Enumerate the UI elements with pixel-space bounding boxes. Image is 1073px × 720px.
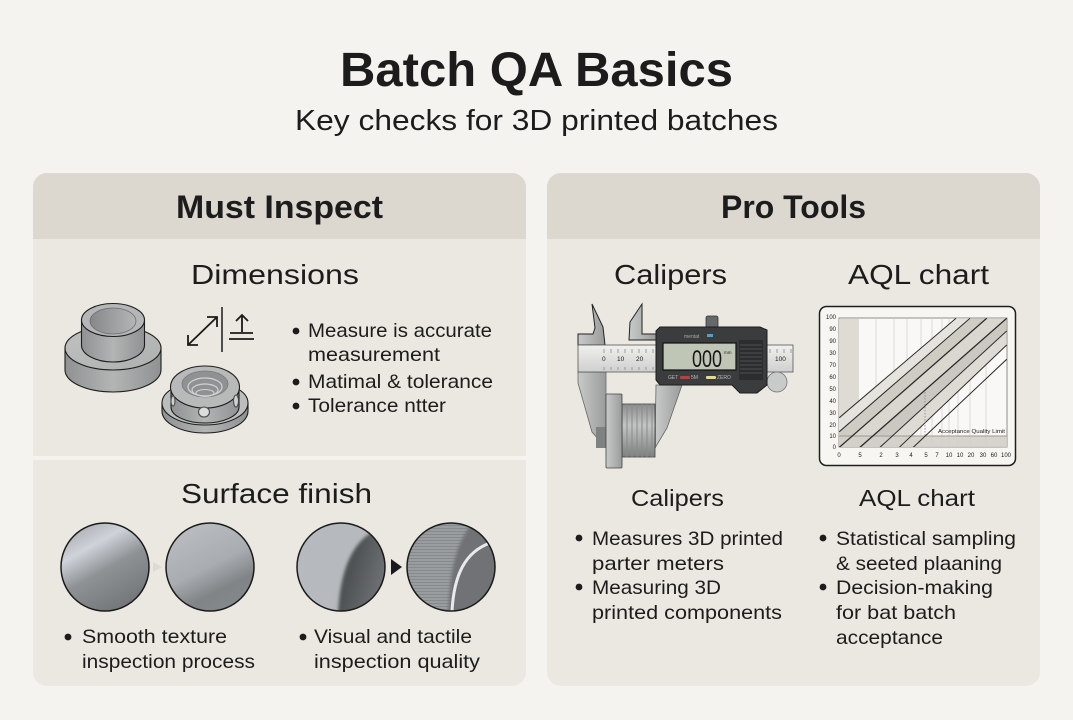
panel header band	[33, 173, 526, 239]
bullet list: calipers: Measures 3D printed	[592, 528, 783, 550]
bullet list: calipers: printed components	[592, 602, 782, 624]
bullet list: dimensions: Tolerance ntter	[308, 395, 447, 417]
section heading: surface finish: Surface finish	[181, 478, 372, 509]
chart x axis labels: 5	[924, 453, 928, 459]
panel header band	[547, 173, 1040, 239]
swatch: textured surface pair	[297, 520, 500, 615]
icon: digital calipers: 10	[617, 356, 625, 363]
icon: digital calipers	[578, 304, 793, 468]
chart y axis labels: 30	[829, 411, 837, 417]
chart annotation: Acceptance Quality Limit	[938, 429, 1005, 435]
panel heading: Pro Tools	[721, 189, 866, 225]
bullet list: AQL chart: & seeted plaaning	[836, 553, 1002, 575]
chart y axis labels: 90	[829, 327, 837, 333]
chart y axis labels	[826, 315, 837, 451]
bullet list: AQL chart	[820, 528, 1016, 649]
column heading: calipers: Calipers	[614, 259, 727, 290]
bullet list: calipers	[576, 528, 783, 624]
column heading: AQL chart: AQL chart	[848, 259, 989, 290]
chart x axis labels: 10	[946, 453, 953, 459]
chart y axis labels: 90	[829, 339, 837, 345]
bullet list: surface finish left: inspection process	[82, 651, 255, 673]
icon: flanged bushing	[65, 304, 161, 392]
icon: digital calipers: 100	[775, 356, 786, 363]
bullet list: dimensions	[293, 320, 493, 417]
chart x axis labels: 30	[980, 453, 987, 459]
chart x axis labels: 4	[909, 453, 913, 459]
chart y axis labels: 0	[833, 445, 837, 451]
chart x axis labels: 7	[935, 453, 939, 459]
icon: measurement symbols	[188, 307, 254, 352]
icon: digital calipers: 000	[692, 346, 722, 373]
chart y axis labels: 60	[829, 375, 837, 381]
chart: AQL chart	[820, 306, 1016, 466]
bullet list: calipers: Measuring 3D	[592, 577, 721, 599]
icon: threaded flange nut	[162, 366, 248, 433]
sub-heading: calipers: Calipers	[631, 485, 724, 511]
icon: digital calipers: 20	[636, 356, 644, 363]
bullet list: AQL chart: Statistical sampling	[836, 528, 1016, 550]
bullet list: AQL chart: for bat batch	[836, 602, 956, 624]
icon: digital calipers: mm	[724, 350, 732, 355]
bullet list: surface finish right: inspection quality	[314, 651, 480, 673]
icon: digital calipers: mentat	[684, 334, 700, 340]
chart x axis labels: 60	[991, 453, 998, 459]
icon: digital calipers: 5M	[691, 375, 698, 381]
bullet list: dimensions: Matimal & tolerance	[308, 371, 493, 393]
panel background	[547, 173, 1040, 686]
swatch: smooth surface pair	[61, 523, 254, 611]
chart x axis labels: 3	[895, 453, 899, 459]
bullet list: dimensions: Measure is accurate	[308, 320, 492, 342]
chart x axis labels	[837, 453, 1012, 459]
chart x axis labels: 5	[858, 453, 862, 459]
chart y axis labels: 50	[829, 387, 837, 393]
chart y axis labels: 10	[829, 434, 837, 440]
icon: digital calipers: ZERO	[717, 375, 731, 381]
chart x axis labels: 2	[879, 453, 883, 459]
chart x axis labels: 20	[968, 453, 975, 459]
chart y axis labels: 20	[829, 423, 837, 429]
bullet list: dimensions: measurement	[308, 344, 441, 366]
bullet list: surface finish right	[300, 626, 480, 673]
bullet list: surface finish left	[65, 626, 255, 673]
bullet list: surface finish right: Visual and tactile	[314, 626, 472, 648]
chart y axis labels: 100	[826, 315, 837, 321]
chart x axis labels: 100	[1001, 453, 1012, 459]
icon: digital calipers: GET	[668, 375, 678, 381]
panel background	[33, 173, 526, 686]
subtitle: Key checks for 3D printed batches	[295, 105, 778, 137]
bullet list: calipers: parter meters	[592, 553, 724, 575]
sub-heading: AQL chart: AQL chart	[859, 485, 976, 511]
panel: pro tools	[547, 173, 1040, 686]
section heading: dimensions: Dimensions	[191, 259, 359, 290]
title: Batch QA Basics	[340, 44, 733, 97]
chart y axis labels: 40	[829, 399, 837, 405]
chart x axis labels: 0	[837, 453, 841, 459]
bullet list: AQL chart: acceptance	[836, 627, 943, 649]
chart x axis labels: 10	[957, 453, 964, 459]
panel: must inspect	[33, 173, 526, 686]
panel heading: Must Inspect	[176, 189, 383, 225]
icon: digital calipers: 0	[602, 356, 606, 363]
chart y axis labels: 30	[829, 351, 837, 357]
bullet list: AQL chart: Decision-making	[836, 577, 993, 599]
bullet list: surface finish left: Smooth texture	[82, 626, 227, 648]
chart y axis labels: 70	[829, 363, 837, 369]
